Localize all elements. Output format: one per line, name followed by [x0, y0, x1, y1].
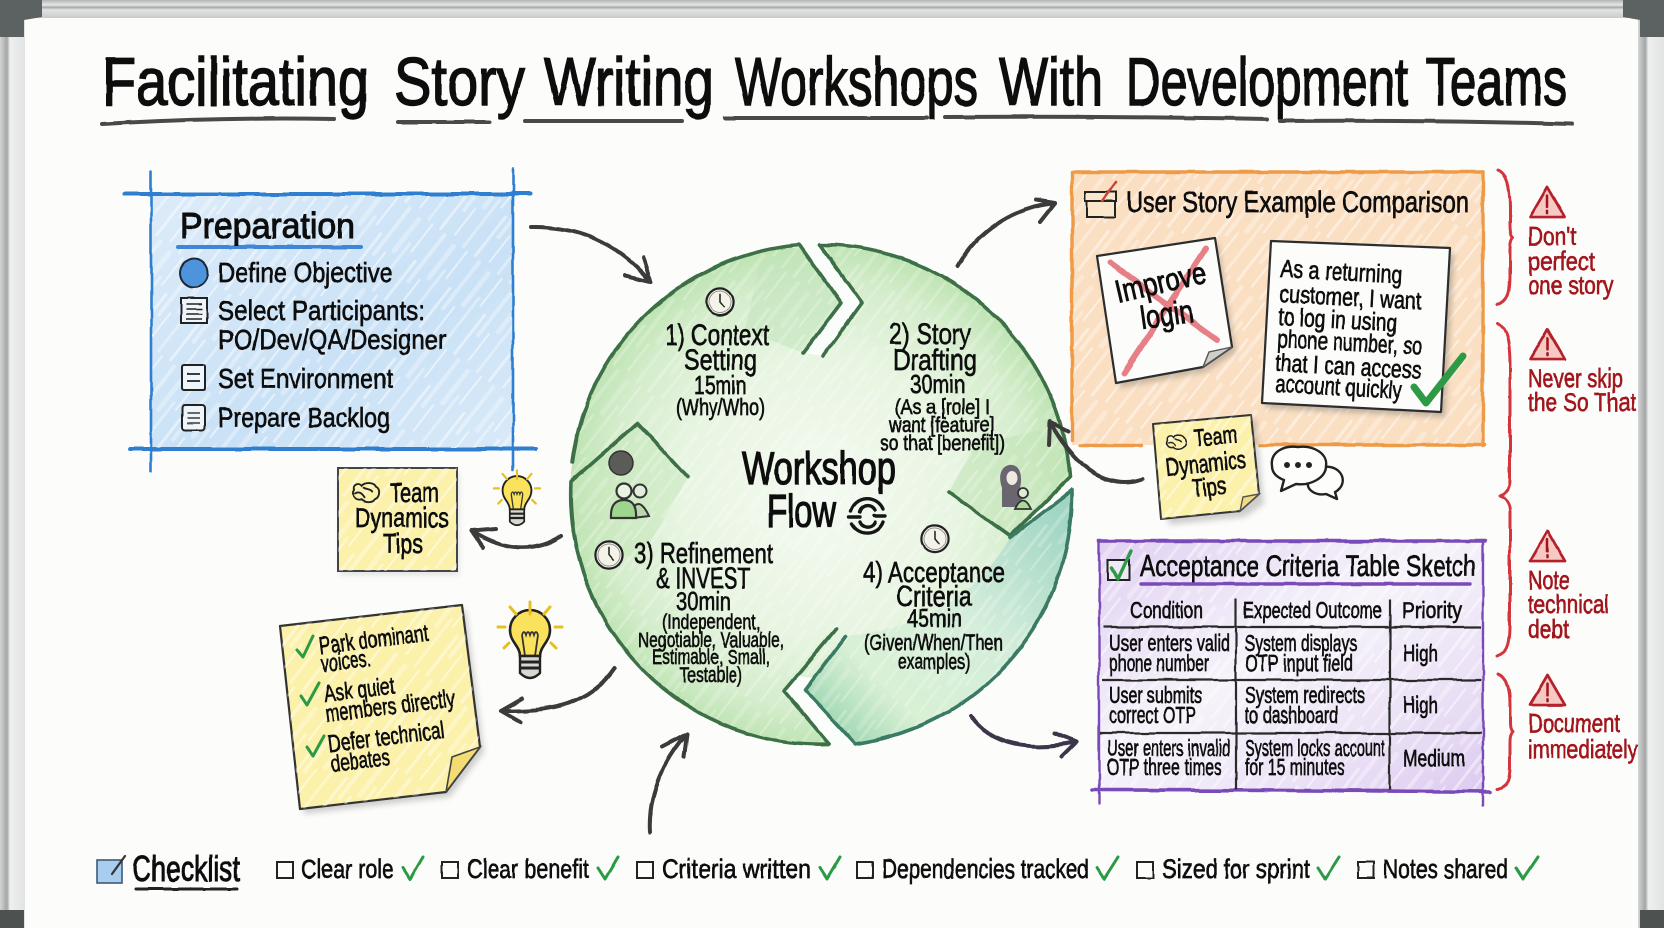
step 4: acceptance criteria: (Given/When/Then — [864, 630, 1003, 655]
green check mark — [1414, 356, 1463, 403]
note: good example — [1262, 241, 1463, 417]
table text: System displays — [1245, 630, 1357, 656]
checklist bar — [97, 848, 1538, 889]
arrow: flow to user story panel — [958, 200, 1055, 266]
arrow: checklist to flow — [650, 734, 687, 832]
table text — [1107, 597, 1465, 780]
warning: note technical debt — [1528, 531, 1609, 644]
heading: preparation: Preparation — [180, 205, 355, 246]
note: facilitation tips list: Defer technical — [326, 717, 446, 758]
table text: OTP three times — [1107, 754, 1222, 780]
warning: note technical debt: technical — [1528, 589, 1609, 619]
step 3: refinement and invest: (Independent, — [662, 611, 760, 634]
note: good example: to log in using — [1278, 303, 1398, 337]
title: Writing — [544, 44, 714, 120]
red cross — [1110, 248, 1217, 373]
icon: speech bubbles — [1272, 447, 1343, 499]
preparation list — [180, 257, 446, 433]
note: team dynamics tips (right): Team — [1193, 421, 1238, 453]
preparation list: PO/Dev/QA/Designer — [218, 324, 446, 355]
warning: don't perfect one story: Don't — [1528, 221, 1577, 251]
note: team dynamics tips (left): Dynamics — [355, 502, 449, 533]
note: team dynamics tips (right): Dynamics — [1165, 446, 1247, 482]
note: team dynamics tips (right) — [1153, 415, 1264, 525]
title: Facilitating — [102, 44, 369, 120]
warning: don't perfect one story — [1528, 187, 1613, 300]
panel: preparation — [125, 168, 535, 471]
title: Workshops — [735, 44, 978, 120]
note: bad example: Improve — [1111, 254, 1209, 310]
step 3: refinement and invest: 30min — [676, 586, 731, 616]
table text: User enters invalid — [1107, 735, 1230, 761]
warning: document immediately: immediately — [1528, 734, 1638, 764]
table text: phone number — [1109, 650, 1209, 676]
step 3: refinement and invest — [595, 538, 784, 687]
step 4: acceptance criteria: Criteria — [896, 581, 973, 613]
note: good example: that I can access — [1275, 349, 1422, 385]
step 3: refinement and invest: Negotiable, Valuable, — [638, 629, 784, 652]
warning: don't perfect one story: perfect — [1528, 246, 1596, 276]
segment 4 tint — [805, 490, 1072, 744]
table text: High — [1403, 640, 1438, 666]
warning: document immediately — [1528, 675, 1638, 764]
icon: refresh loop — [849, 499, 885, 533]
diagram: workshop flow circle — [570, 243, 1074, 746]
warning: never skip the so that: Never skip — [1528, 363, 1623, 393]
table text: High — [1403, 692, 1438, 718]
warning: never skip the so that: the So That — [1528, 387, 1637, 417]
step 3: refinement and invest: & INVEST — [656, 563, 750, 595]
arrow: flow to acceptance criteria — [971, 716, 1076, 757]
note: good example: As a returning — [1280, 255, 1403, 289]
step 2: story drafting: 30min — [910, 369, 965, 399]
panel border sketch lines — [1092, 541, 1490, 806]
circle outline — [571, 245, 1072, 744]
table text: Condition — [1130, 597, 1203, 623]
note: team dynamics tips (right): Tips — [1191, 472, 1227, 503]
step 4: acceptance criteria: 45min — [907, 603, 962, 633]
heading: user story example comparison — [1085, 182, 1469, 219]
step 2: story drafting: want [feature] — [888, 414, 994, 437]
heading: acceptance criteria table sketch — [1108, 550, 1476, 584]
brackets: red warning braces — [1497, 170, 1513, 789]
step 4: acceptance criteria: 4) Acceptance — [863, 557, 1005, 589]
table text: System locks account — [1245, 735, 1385, 761]
note: facilitation tips list: voices. — [319, 645, 372, 678]
arrow: team tips to flow — [1049, 422, 1142, 482]
note: team dynamics tips (left): Tips — [383, 528, 423, 559]
note: team dynamics tips (left) — [338, 468, 459, 575]
icon: light bulb small — [494, 470, 540, 525]
note: facilitation tips list: members directly — [323, 685, 457, 728]
note: facilitation tips list: debates — [329, 744, 391, 778]
title: Story — [394, 44, 525, 120]
icon: checklist — [97, 856, 125, 883]
step 1: context setting: 15min — [694, 370, 746, 400]
panel: user story example comparison — [1072, 172, 1485, 446]
panel: acceptance criteria table — [1092, 540, 1490, 806]
note: good example: account quickly — [1275, 370, 1403, 405]
step 2: story drafting: (As a [role] I — [895, 396, 990, 419]
table text: to dashboard — [1245, 702, 1338, 728]
preparation list: Prepare Backlog — [218, 402, 390, 433]
title: With — [999, 44, 1103, 120]
arrow: flow to team tips — [472, 529, 562, 548]
table grid — [1100, 599, 1481, 790]
note: good example: customer, I want — [1279, 280, 1422, 315]
warning: document immediately: Document — [1528, 708, 1621, 738]
note: facilitation tips list — [280, 605, 484, 814]
warning: note technical debt: debt — [1528, 614, 1570, 644]
preparation list: Select Participants: — [218, 295, 425, 326]
item: criteria written: Criteria written — [662, 854, 811, 884]
item: sized for sprint: Sized for sprint — [1162, 854, 1310, 884]
step 1: context setting — [665, 288, 769, 420]
chevron gaps — [784, 243, 1074, 746]
flow centre label: Workshop — [742, 442, 896, 494]
title — [102, 44, 1572, 124]
title: Teams — [1426, 44, 1567, 120]
icon: people group — [609, 451, 649, 518]
step 3: refinement and invest: Testable) — [680, 664, 742, 687]
icon: facilitator — [1000, 465, 1031, 509]
step 2: story drafting — [880, 318, 1005, 455]
table text: OTP input field — [1245, 650, 1353, 676]
icon: light bulb large — [498, 602, 562, 678]
arrow: flow to tips list — [501, 668, 615, 722]
step 4: acceptance criteria: examples) — [898, 649, 970, 674]
table text: Expected Outcome — [1243, 597, 1382, 623]
step 4: acceptance criteria — [863, 525, 1005, 674]
item: dependencies tracked: Dependencies tracked — [882, 854, 1089, 884]
panel border sketch lines — [1072, 172, 1485, 446]
step 3: refinement and invest: 3) Refinement — [634, 538, 773, 570]
table text: for 15 minutes — [1245, 754, 1345, 780]
warning: don't perfect one story: one story — [1528, 270, 1613, 300]
preparation list: Define Objective — [218, 257, 393, 288]
note: team dynamics tips (left): Team — [390, 477, 439, 508]
preparation list: Set Environment — [218, 363, 393, 394]
panel border sketch lines — [125, 168, 535, 471]
table text: User submits — [1109, 682, 1202, 708]
table text: correct OTP — [1109, 702, 1196, 728]
heading: user story example comparison: User Story Example Comparison — [1126, 186, 1469, 219]
step 2: story drafting: 2) Story — [889, 318, 971, 351]
step 1: context setting: Setting — [684, 344, 757, 377]
note: facilitation tips list: Park dominant — [317, 620, 430, 660]
step 2: story drafting: Drafting — [893, 344, 977, 377]
table text: Priority — [1402, 597, 1462, 623]
table text: User enters valid — [1109, 630, 1230, 656]
note: facilitation tips list: Ask quiet — [322, 672, 396, 708]
heading: acceptance criteria table sketch: Acceptance Criteria Table Sketch — [1140, 550, 1476, 583]
step 3: refinement and invest: Estimable, Small, — [652, 646, 770, 669]
heading: checklist: Checklist — [132, 848, 240, 889]
item: clear role: Clear role — [301, 854, 394, 884]
note: bad example — [1097, 238, 1236, 388]
item: notes shared: Notes shared — [1383, 854, 1508, 884]
table text: System redirects — [1245, 682, 1365, 708]
flow centre label: Flow — [767, 485, 837, 537]
warning: note technical debt: Note — [1528, 565, 1570, 595]
arrow: preparation to flow — [531, 227, 651, 282]
warning: never skip the so that — [1528, 329, 1637, 417]
item: clear benefit: Clear benefit — [467, 854, 589, 884]
step 1: context setting: 1) Context — [665, 319, 769, 352]
step 1: context setting: (Why/Who) — [676, 394, 765, 420]
step 2: story drafting: so that [benefit]) — [880, 432, 1005, 455]
flow centre label — [742, 442, 896, 537]
title: Development — [1126, 44, 1408, 120]
table text: Medium — [1403, 745, 1465, 771]
note: good example: phone number, so — [1277, 325, 1423, 361]
note: bad example: login — [1138, 293, 1195, 336]
